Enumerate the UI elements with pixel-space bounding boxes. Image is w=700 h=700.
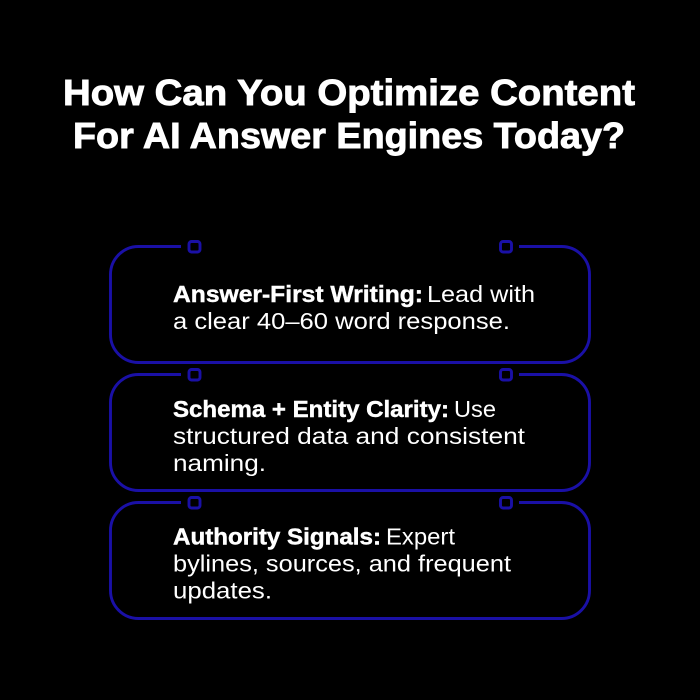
- text block: Answer-First Writing:: [173, 281, 423, 307]
- text block: structured data and consistent: [173, 423, 526, 449]
- text block: Use: [454, 396, 496, 422]
- panel: authority signals: [110, 498, 590, 618]
- text block: bylines, sources, and frequent: [173, 550, 511, 576]
- panel: answer-first writing: [110, 242, 590, 363]
- text block: [173, 281, 535, 334]
- text block: [173, 524, 511, 604]
- text block: Authority Signals:: [173, 524, 381, 550]
- card outline: [110, 502, 590, 618]
- text block: updates.: [173, 578, 272, 604]
- panel: schema and entity clarity: [110, 370, 590, 491]
- card outline: [110, 246, 590, 363]
- text block: Expert: [386, 524, 455, 550]
- text block: Lead with: [427, 281, 535, 307]
- connector node right: [500, 498, 512, 508]
- connector node left: [189, 242, 200, 252]
- title: For AI Answer Engines Today?: [73, 115, 625, 156]
- title: How Can You Optimize Content: [63, 72, 635, 113]
- text block: naming.: [173, 450, 266, 476]
- text block: [173, 396, 526, 476]
- card outline: [110, 374, 590, 491]
- text block: a clear 40–60 word response.: [173, 308, 510, 334]
- title: [63, 72, 635, 156]
- connector node right: [500, 370, 512, 380]
- text block: Schema + Entity Clarity:: [173, 396, 449, 422]
- connector node left: [189, 498, 200, 508]
- connector node left: [189, 370, 200, 380]
- connector node right: [500, 242, 512, 252]
